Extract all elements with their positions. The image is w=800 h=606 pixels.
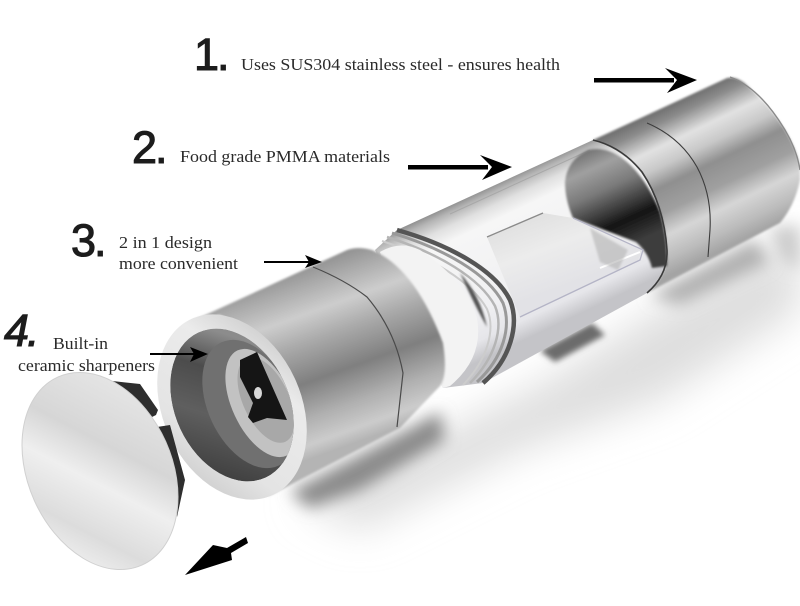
arrow 3 [264,255,322,268]
heading 3 [71,215,238,273]
arrow 1 [594,68,697,93]
heading 2: 2. [132,122,166,173]
heading 1 [194,29,561,80]
grinder: upper steel cylinder [593,77,800,293]
window edge and band between tube and steel [593,140,667,293]
heading 2 [132,122,390,173]
front ring [128,290,336,524]
heading 3: 2 in 1 design [119,233,213,252]
cast shadows [290,225,800,530]
arrow 2 [408,155,512,180]
dark hole seen through the tube [565,149,667,268]
arrow 4 [150,347,208,362]
inner salt chamber wedge [487,213,643,317]
heading 4: Built-in [53,334,109,353]
grinder: transparent acrylic tube [375,140,667,388]
tube rim ring [380,245,478,388]
black burr mechanism [240,352,287,423]
cap dark gasket [103,380,185,517]
heading 4: ceramic sharpeners [18,356,155,375]
seam [313,267,403,427]
heading 3: more convenient [119,254,238,273]
grinder: lower steel cylinder [157,246,446,500]
cap disc [0,348,208,594]
heading 2: Food grade PMMA materials [180,147,390,166]
heading 4 [4,305,155,375]
removable cap [0,348,208,594]
crescent shadow inside neck [460,273,487,327]
threaded neck [382,230,514,385]
arrow 5: cap removal [185,537,248,575]
heading 1: Uses SUS304 stainless steel - ensures health [241,55,561,74]
grinder bore [170,328,294,482]
highlight line along the tube top [450,150,590,214]
centre screw [254,387,262,399]
heading 3: 3. [71,215,105,266]
heading 1: 1. [194,29,228,80]
heading 4: 4. [4,305,38,356]
